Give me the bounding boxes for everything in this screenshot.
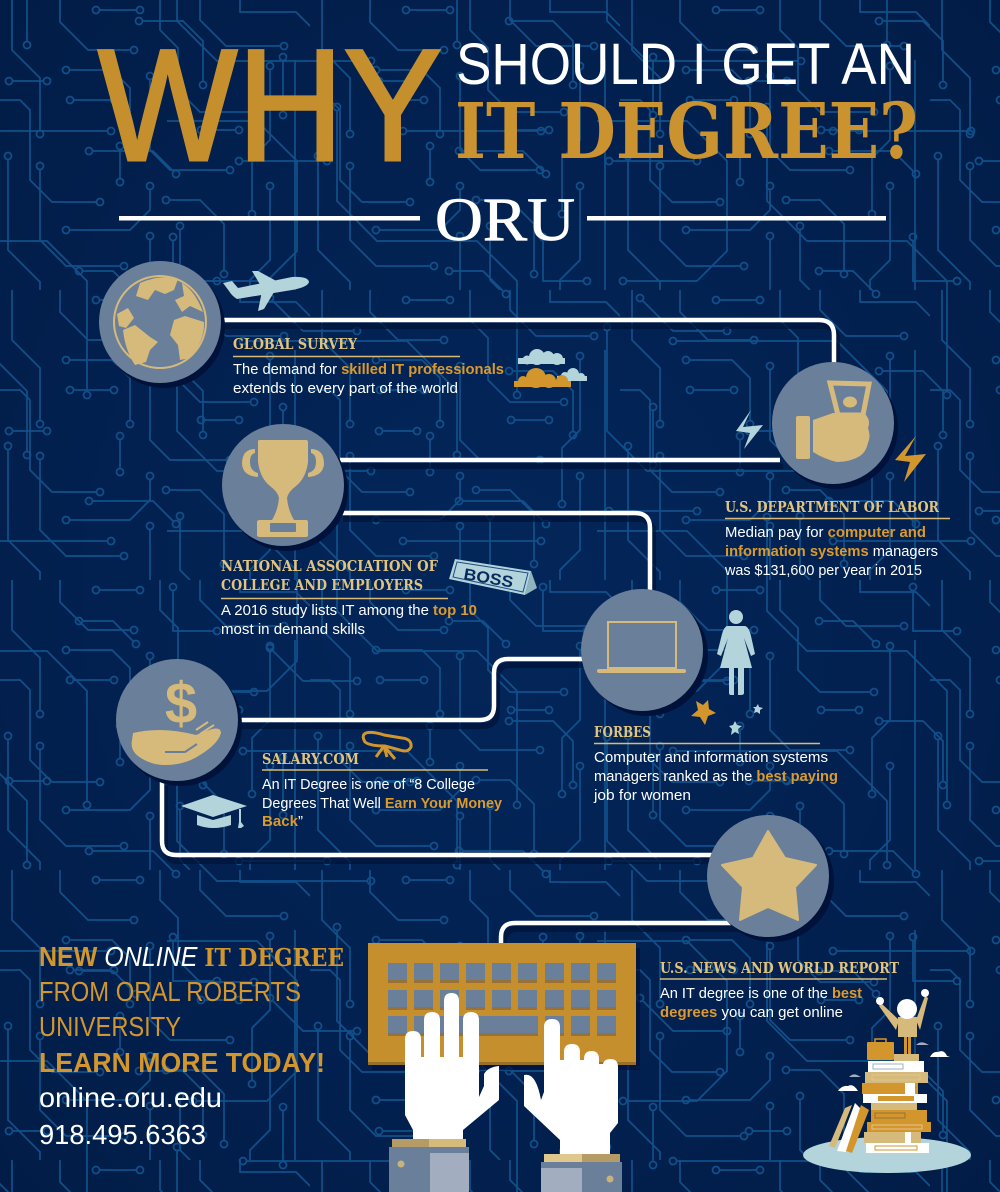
text: national association: COLLEGE AND EMPLOYERS <box>221 577 423 594</box>
text: us news: degrees you can get online <box>660 1005 843 1021</box>
text: global survey <box>233 336 504 397</box>
call to action text: NEW ONLINE IT DEGREE <box>39 941 344 972</box>
text: national association: most in demand skills <box>221 622 365 638</box>
keyboard <box>368 943 640 1070</box>
circle: salary hand with dollar: $ <box>165 671 197 736</box>
text: department of labor: was $131,600 per year in 2015 <box>724 563 922 579</box>
call to action text: 918.495.6363 <box>39 1119 206 1150</box>
logo: ORU with rules <box>119 187 886 254</box>
icon: airplane <box>223 271 309 311</box>
title: SHOULD I GET AN <box>456 32 915 97</box>
text: department of labor: U.S. DEPARTMENT OF LABOR <box>725 499 940 516</box>
icon: stars <box>691 700 763 735</box>
call to action text: UNIVERSITY <box>39 1011 181 1042</box>
call to action text <box>39 941 344 1150</box>
circle: salary hand with dollar <box>116 659 242 786</box>
icon: diploma <box>363 732 411 759</box>
text: us news <box>660 960 899 1021</box>
icon: clouds <box>514 349 587 388</box>
logo: ORU with rules: ORU <box>435 187 575 254</box>
title <box>98 16 918 194</box>
text: department of labor: Median pay for computer and <box>725 525 926 541</box>
text: forbes: FORBES <box>594 724 651 741</box>
text: global survey: The demand for skilled IT professionals <box>233 362 504 378</box>
text: forbes: job for women <box>593 788 691 804</box>
text: national association <box>221 558 477 638</box>
text: us news: U.S. NEWS AND WORLD REPORT <box>660 960 899 977</box>
connector path <box>162 320 837 952</box>
text: national association: NATIONAL ASSOCIATION OF <box>221 558 439 575</box>
right hand typing <box>524 1019 622 1192</box>
text: salary.com: An IT Degree is one of “8 College <box>262 777 475 793</box>
title: IT DEGREE? <box>455 87 918 177</box>
circle: national association trophy <box>222 424 348 551</box>
circle: forbes laptop <box>581 589 708 716</box>
text: global survey: extends to every part of the world <box>233 381 458 397</box>
text: forbes: managers ranked as the best paying <box>594 769 838 785</box>
icon: graduation cap <box>181 795 247 828</box>
call to action text: FROM ORAL ROBERTS <box>39 976 301 1007</box>
text: forbes <box>593 724 838 804</box>
text: department of labor <box>724 499 950 579</box>
circle: department of labor hand with money <box>772 362 898 489</box>
text: us news: An IT degree is one of the best <box>660 986 862 1002</box>
text: salary.com: Back” <box>262 814 303 830</box>
text: salary.com: Degrees That Well Earn Your Money <box>262 796 502 812</box>
icon: woman figure <box>717 610 755 695</box>
text: global survey: GLOBAL SURVEY <box>233 336 358 353</box>
call to action text: LEARN MORE TODAY! <box>39 1047 325 1078</box>
circle: us news star <box>707 815 834 942</box>
left hand typing <box>389 993 499 1192</box>
title: WHY <box>98 16 442 194</box>
text: department of labor: information systems managers <box>725 544 938 560</box>
icon: boss nameplate <box>449 559 537 595</box>
text: forbes: Computer and information systems <box>594 750 828 766</box>
icon: boss nameplate: BOSS <box>462 566 515 592</box>
icon: lightning bolts <box>736 410 926 482</box>
circle: global survey globe <box>99 261 225 388</box>
call to action text: online.oru.edu <box>39 1082 222 1113</box>
text: national association: A 2016 study lists IT among the top 10 <box>221 603 477 619</box>
text: salary.com: SALARY.COM <box>262 751 359 768</box>
illustration: man on stack of books <box>803 989 971 1173</box>
text: salary.com <box>262 751 502 830</box>
